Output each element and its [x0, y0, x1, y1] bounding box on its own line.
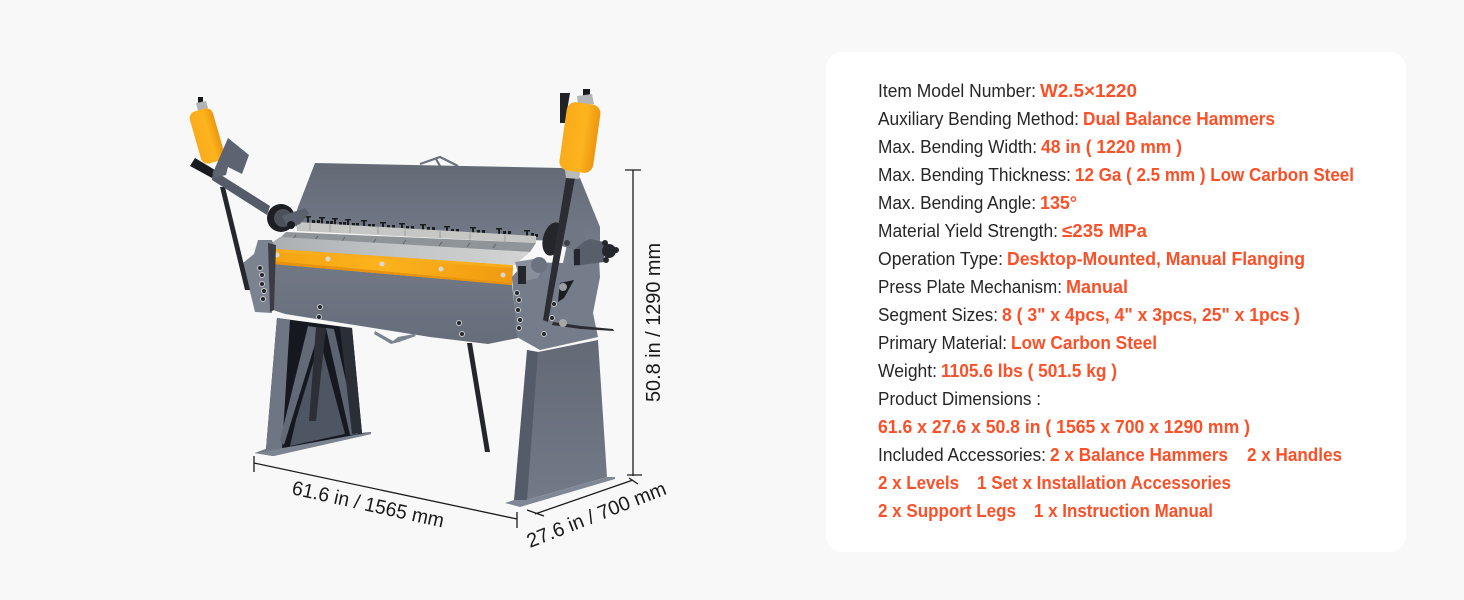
specification list: 2 x Handles [1247, 445, 1342, 465]
label: height: 50.8 in / 1290 mm [643, 243, 665, 402]
specification list: Primary Material: [878, 333, 1007, 353]
lower linkage [374, 331, 416, 344]
specification list: Desktop-Mounted, Manual Flanging [1007, 249, 1305, 269]
left lever rod [220, 187, 250, 290]
left pivot wheel [267, 204, 309, 232]
specification list: 12 Ga ( 2.5 mm ) Low Carbon Steel [1075, 165, 1354, 185]
left support leg [255, 318, 371, 456]
specification list: Low Carbon Steel [1011, 333, 1157, 353]
product illustration: bending brake [188, 89, 619, 507]
specification list: Item Model Number: [878, 81, 1036, 101]
back plate [292, 163, 600, 242]
right balance hammer [558, 89, 602, 179]
left balance hammer [188, 97, 226, 165]
left hammer handle [190, 138, 270, 215]
specification list: 1 x Instruction Manual [1034, 501, 1213, 521]
specification list: Dual Balance Hammers [1083, 109, 1275, 129]
specification list: 1 Set x Installation Accessories [977, 473, 1231, 493]
front body [273, 262, 518, 344]
specification list: Product Dimensions : [878, 389, 1041, 409]
specification list: W2.5×1220 [1040, 81, 1137, 101]
specification list: Max. Bending Angle: [878, 193, 1036, 213]
panel: specifications card [826, 52, 1406, 552]
specification list: 48 in ( 1220 mm ) [1041, 137, 1182, 157]
specification list: Included Accessories: [878, 445, 1046, 465]
specification list: 61.6 x 27.6 x 50.8 in ( 1565 x 700 x 1290 mm ) [878, 417, 1250, 437]
specification list: 2 x Support Legs [878, 501, 1016, 521]
dimension: height [625, 170, 665, 476]
specification list: Weight: [878, 361, 937, 381]
specification list: Material Yield Strength: [878, 221, 1058, 241]
right pivot wheel [539, 220, 574, 302]
dimension: length [254, 456, 517, 532]
dimension: width [524, 478, 670, 553]
specification list: ≤235 MPa [1062, 221, 1148, 241]
clamping bolts [305, 216, 538, 237]
specification list: 2 x Levels [878, 473, 959, 493]
front body holes [316, 304, 464, 336]
specification list: Max. Bending Thickness: [878, 165, 1071, 185]
right adjuster rod [552, 319, 614, 331]
specification list: 135° [1040, 193, 1077, 213]
right end bracket [512, 240, 600, 350]
specification list: Segment Sizes: [878, 305, 998, 325]
right lever rod [543, 178, 575, 322]
right clamp and knob [562, 221, 619, 266]
specification list: Auxiliary Bending Method: [878, 109, 1079, 129]
specification list: 2 x Balance Hammers [1050, 445, 1228, 465]
label: width: 27.6 in / 700 mm [524, 478, 670, 553]
specification list: Max. Bending Width: [878, 137, 1037, 157]
yellow clamp bar [262, 248, 513, 285]
specification list: 8 ( 3" x 4pcs, 4" x 3pcs, 25" x 1pcs ) [1002, 305, 1300, 325]
left end bracket [243, 240, 276, 313]
right support leg [505, 340, 615, 507]
specification list: Press Plate Mechanism: [878, 277, 1062, 297]
right hammer handle [560, 93, 570, 123]
specification list: Manual [1066, 277, 1128, 297]
specification list: Operation Type: [878, 249, 1003, 269]
top handle frame [420, 157, 458, 166]
specification list [878, 81, 1354, 521]
bending segments [263, 222, 536, 265]
specification list: 1105.6 lbs ( 501.5 kg ) [941, 361, 1117, 381]
center support rod [467, 343, 490, 452]
label: length: 61.6 in / 1565 mm [290, 477, 446, 532]
